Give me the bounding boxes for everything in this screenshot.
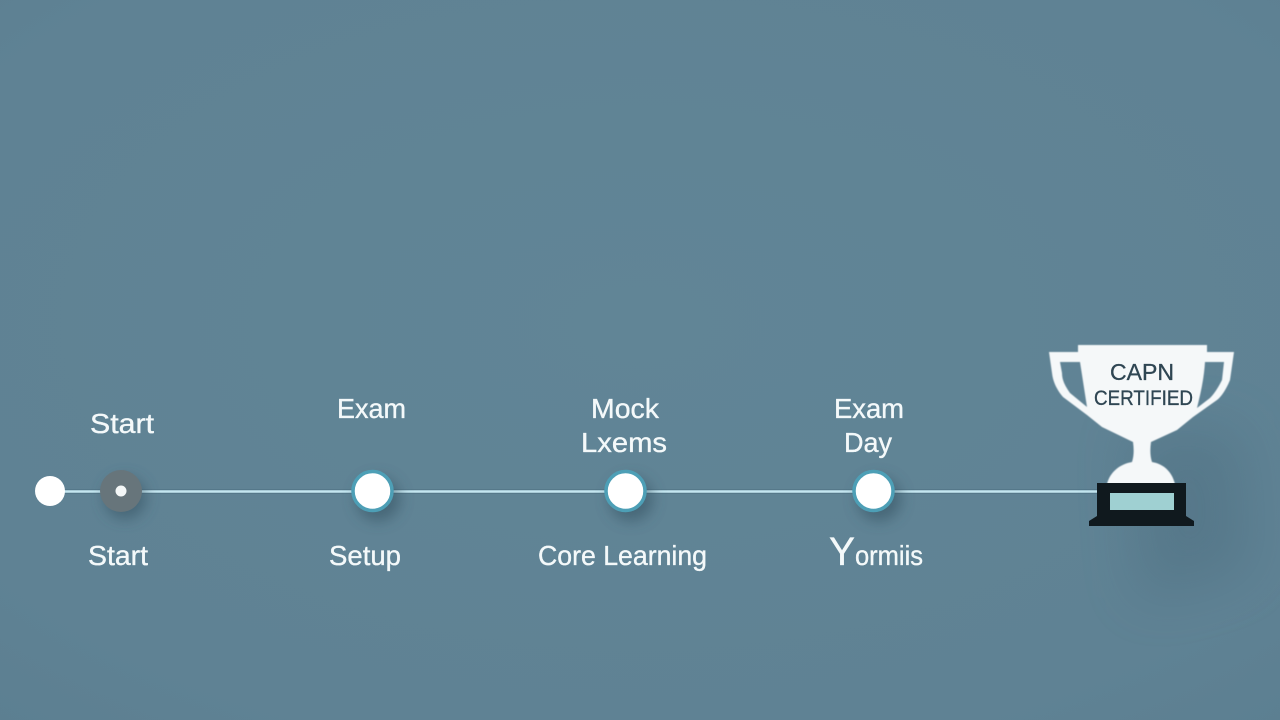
node: mock exams <box>606 472 653 521</box>
label: mock exams: Mock <box>591 393 660 424</box>
label: core learning: Core Learning <box>538 540 707 571</box>
label: setup: Setup <box>329 540 401 571</box>
label: start bottom: Start <box>88 540 148 571</box>
label: exam: Exam <box>337 393 406 424</box>
trophy text <box>1094 359 1193 410</box>
label: yomiis: ormiis <box>855 540 923 571</box>
label: mock exams <box>581 393 667 458</box>
label: exam day <box>834 393 904 458</box>
icon: trophy <box>1049 345 1250 600</box>
trophy text: CERTIFIED <box>1094 387 1193 410</box>
trophy text: CAPN <box>1110 359 1174 385</box>
node: exam setup <box>353 472 400 521</box>
trophy plaque <box>1110 493 1174 510</box>
label: yomiis: Y <box>829 530 855 574</box>
node: exam day <box>854 472 901 521</box>
label: yomiis <box>829 530 923 574</box>
label: start top: Start <box>90 408 154 439</box>
label: mock exams: Lxems <box>581 427 667 458</box>
trophy shadow <box>1130 430 1250 600</box>
trophy cup and handles <box>1049 345 1234 484</box>
node: start <box>100 470 146 519</box>
label: exam day: Exam <box>834 393 904 424</box>
start dot <box>35 476 65 506</box>
label: exam day: Day <box>844 427 892 458</box>
timeline line <box>50 489 1100 494</box>
trophy base <box>1089 483 1194 526</box>
